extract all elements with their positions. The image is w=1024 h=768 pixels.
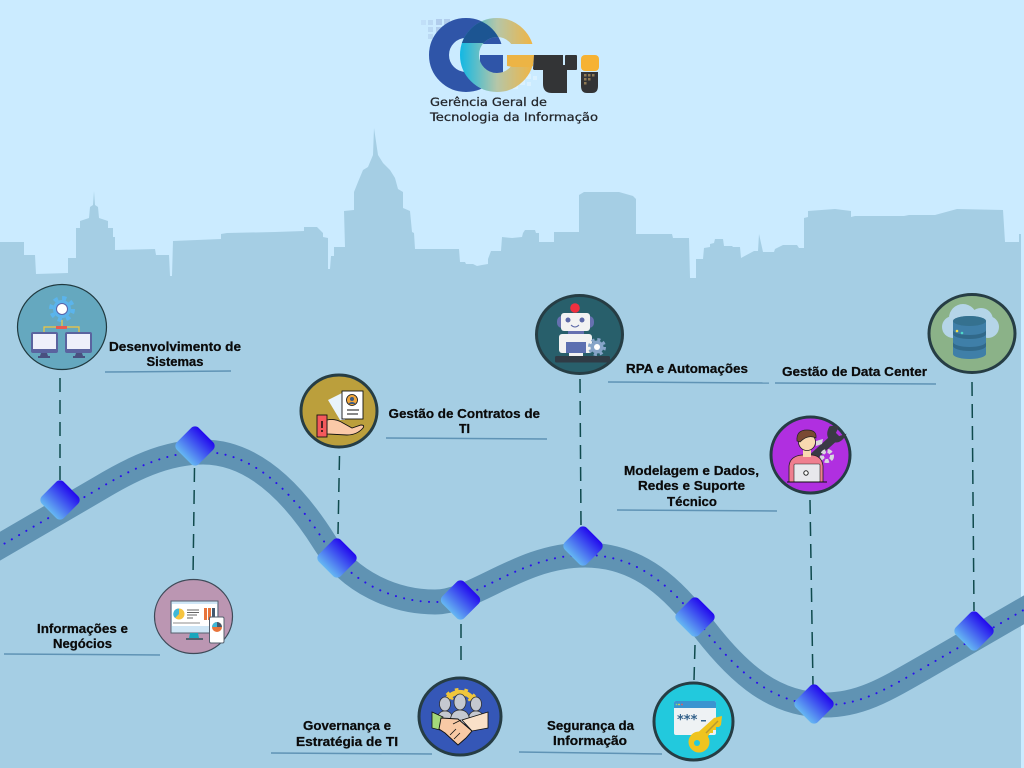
label: Gestão de Contratos de TI <box>386 406 547 439</box>
icon: information security key <box>654 683 733 760</box>
label: RPA e Automações: RPA e Automações <box>626 361 748 376</box>
icon: governance handshake <box>419 678 501 755</box>
logo <box>421 19 599 124</box>
logo: Tecnologia da Informação <box>429 110 598 124</box>
label: Informações e Negócios: Negócios <box>53 636 112 651</box>
label: Desenvolvimento de Sistemas: Desenvolvimento de <box>109 339 241 354</box>
label: Modelagem e Dados, Redes e Suporte Técnico <box>617 463 777 511</box>
winding road <box>0 452 1024 705</box>
label: Governança e Estratégia de TI <box>271 718 432 754</box>
label: Gestão de Contratos de TI: Gestão de Contratos de <box>388 406 540 421</box>
label: Governança e Estratégia de TI: Estratégia de TI <box>296 734 398 749</box>
dashed connectors <box>60 378 974 686</box>
label: Modelagem e Dados, Redes e Suporte Técnico: Modelagem e Dados, <box>624 463 759 478</box>
label: Gestão de Contratos de TI: TI <box>459 421 470 436</box>
icon: contract management <box>301 375 377 447</box>
label: Informações e Negócios <box>4 621 160 655</box>
label: Segurança da Informação <box>519 718 662 754</box>
label: Informações e Negócios: Informações e <box>37 621 128 636</box>
icon: support technician <box>771 417 850 493</box>
label: Modelagem e Dados, Redes e Suporte Técnico: Redes e Suporte <box>638 478 745 493</box>
label: Desenvolvimento de Sistemas <box>105 339 241 372</box>
label: Modelagem e Dados, Redes e Suporte Técnico: Técnico <box>667 494 717 509</box>
label: Segurança da Informação: Informação <box>553 733 627 748</box>
logo text: Gerência Geral de <box>430 95 547 109</box>
label: Governança e Estratégia de TI: Governança e <box>303 718 391 733</box>
label: Desenvolvimento de Sistemas: Sistemas <box>146 354 204 369</box>
icon: robot automation <box>536 296 622 374</box>
label: Segurança da Informação: Segurança da <box>547 718 635 733</box>
icon: data center <box>929 294 1015 372</box>
icon: development systems <box>18 284 106 370</box>
road markers <box>38 424 996 726</box>
password symbols: *** <box>677 713 698 728</box>
label: Gestão de Data Center: Gestão de Data Center <box>782 364 927 379</box>
icon: information and business <box>154 580 232 654</box>
